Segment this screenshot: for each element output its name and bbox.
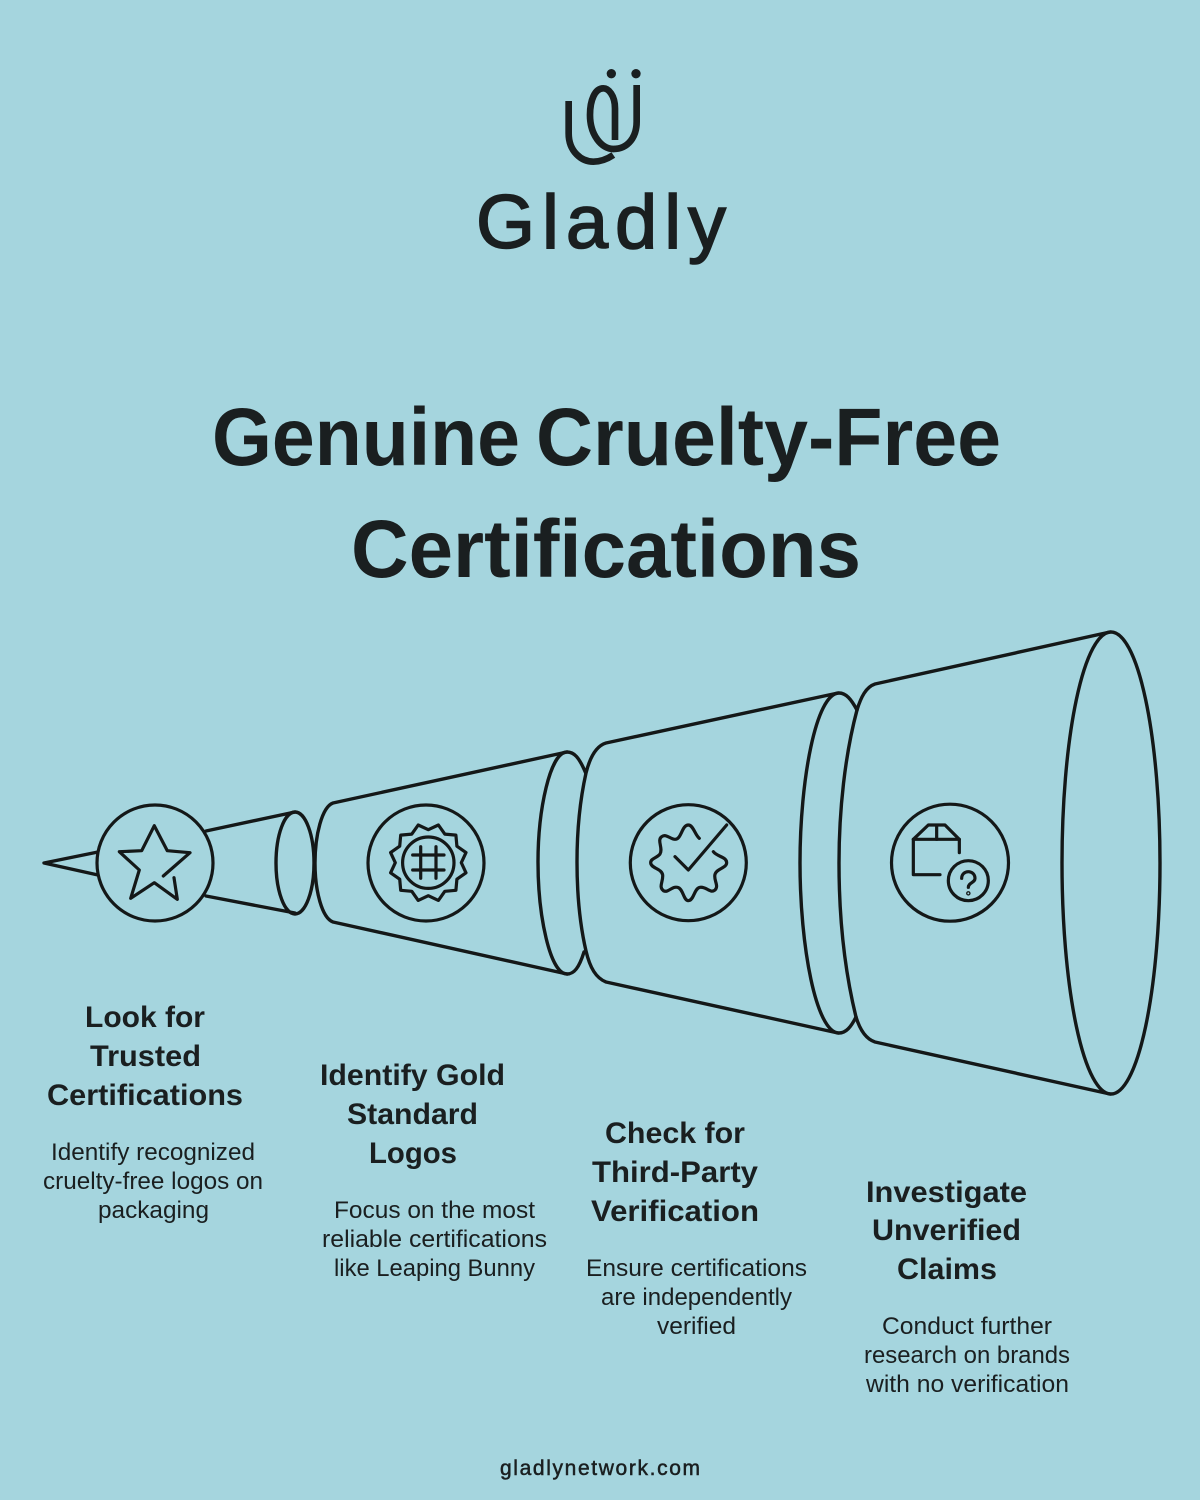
description: cruelty-free logos on	[43, 1168, 263, 1195]
icon: verified badge check	[630, 805, 746, 921]
icon: paperclip face	[569, 69, 641, 162]
description	[864, 1313, 1070, 1398]
heading: Check for	[605, 1117, 745, 1150]
heading: Trusted	[90, 1040, 201, 1073]
description	[586, 1255, 807, 1340]
description: Conduct further	[882, 1313, 1052, 1340]
description: verified	[657, 1313, 736, 1340]
heading: Logos	[369, 1137, 457, 1170]
description	[322, 1197, 547, 1282]
heading	[866, 1176, 1027, 1286]
heading: Look for	[85, 1001, 205, 1034]
title: Cruelty-Free	[536, 392, 1001, 483]
step 3: Check for Third-Party Verification	[586, 1117, 807, 1340]
icon: package with question mark	[892, 804, 1008, 921]
description: packaging	[98, 1197, 209, 1224]
description: like Leaping Bunny	[334, 1255, 535, 1282]
wordmark: Gladly	[476, 180, 726, 265]
description: are independently	[601, 1284, 792, 1311]
funnel segment: fourth cone	[839, 632, 1160, 1094]
funnel diagram	[44, 632, 1160, 1094]
heading: Claims	[897, 1253, 997, 1286]
funnel segment: small cone	[206, 812, 314, 914]
step 2: Identify Gold Standard Logos	[320, 1059, 547, 1282]
heading: Unverified	[872, 1214, 1021, 1247]
description: Ensure certifications	[586, 1255, 807, 1282]
description: with no verification	[865, 1371, 1069, 1398]
description: Identify recognized	[51, 1139, 255, 1166]
description: reliable certifications	[322, 1226, 547, 1253]
title: Certifications	[351, 504, 861, 595]
description: research on brands	[864, 1342, 1070, 1369]
heading: Third-Party	[592, 1156, 758, 1189]
footer: website: gladlynetwork.com	[500, 1457, 700, 1480]
funnel segment: second cone	[315, 752, 586, 974]
heading: Standard	[347, 1098, 478, 1131]
title	[212, 392, 1001, 595]
funnel segment: tip	[44, 852, 98, 875]
heading	[591, 1117, 759, 1228]
step 4: Investigate Unverified Claims	[864, 1176, 1070, 1398]
heading: Identify Gold	[320, 1059, 505, 1092]
heading	[47, 1001, 243, 1112]
icon: gold seal with hash	[368, 805, 484, 921]
heading: Verification	[591, 1195, 759, 1228]
heading: Investigate	[866, 1176, 1027, 1209]
heading: Certifications	[47, 1079, 243, 1112]
funnel segment: third cone	[577, 693, 857, 1033]
logo: Gladly	[476, 69, 726, 265]
description	[43, 1139, 263, 1224]
title: Genuine	[212, 392, 520, 483]
description: Focus on the most	[334, 1197, 535, 1224]
step 1: Look for Trusted Certifications	[43, 1001, 263, 1224]
heading	[320, 1059, 505, 1170]
icon: star	[97, 805, 213, 921]
